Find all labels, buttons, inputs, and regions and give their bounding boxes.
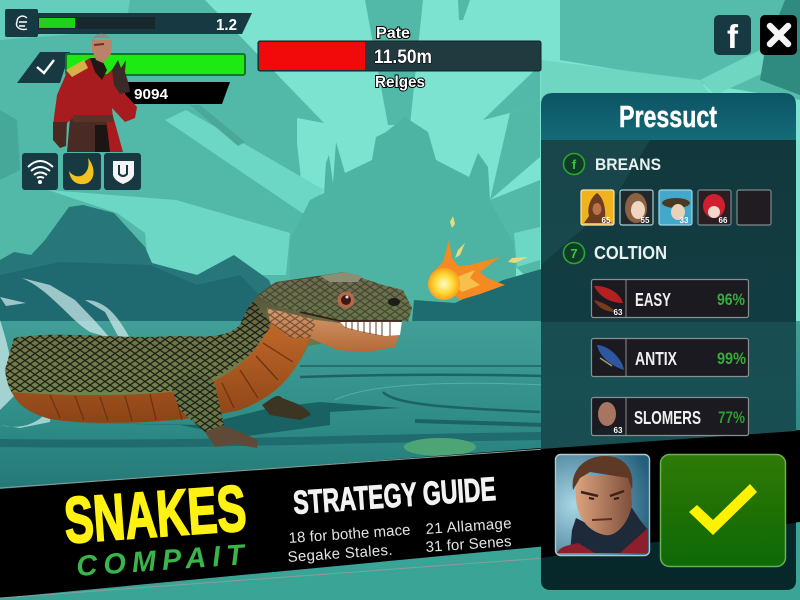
head bbox=[92, 40, 112, 63]
avatar: hat: 33 bbox=[680, 216, 689, 225]
panel black band bbox=[541, 431, 796, 558]
avatar: hat bbox=[659, 190, 692, 225]
snake shadow bbox=[40, 402, 400, 437]
nostril bbox=[388, 298, 400, 306]
row: easy: 63 bbox=[614, 308, 623, 317]
glove bbox=[53, 122, 67, 148]
mouth line bbox=[300, 312, 402, 321]
avatar: red hair: 66 bbox=[719, 216, 728, 225]
right hills bbox=[412, 268, 545, 322]
check mark bbox=[689, 484, 757, 535]
leg scale texture bbox=[170, 373, 224, 440]
panel hill tint bbox=[541, 140, 650, 265]
eye bbox=[338, 292, 354, 308]
smoke wisps bbox=[0, 278, 130, 428]
character: commander in red coat bbox=[53, 34, 137, 152]
near mountains bbox=[0, 205, 285, 322]
coat skirt bbox=[67, 118, 112, 152]
teeth bbox=[340, 321, 402, 336]
epaulette bbox=[66, 60, 88, 77]
panel lower area bbox=[541, 523, 796, 590]
section: breans: BREANS bbox=[595, 155, 661, 174]
banner text left: 18 for bothe mace bbox=[288, 522, 411, 547]
snake belly bbox=[12, 322, 310, 423]
lily pad bbox=[404, 438, 476, 456]
button: confirm bbox=[660, 454, 786, 566]
section: coltion bbox=[564, 242, 667, 264]
shirt bbox=[90, 58, 107, 80]
panel: pressuct bbox=[541, 93, 796, 590]
cheek scales bbox=[267, 308, 317, 338]
button: facebook bbox=[714, 15, 751, 55]
snake jaw bbox=[267, 308, 400, 352]
button: facebook: f bbox=[727, 18, 739, 55]
raised hand bbox=[112, 60, 130, 94]
hud: level bar bbox=[5, 9, 252, 37]
section: breans: f bbox=[572, 157, 577, 172]
head top bbox=[257, 272, 412, 322]
front foot bbox=[205, 425, 258, 448]
hud: score bar bbox=[125, 82, 230, 104]
row: easy: 96% bbox=[717, 290, 745, 309]
banner text left: Segake Stales. bbox=[287, 542, 393, 566]
section: coltion: 7 bbox=[570, 246, 578, 261]
lower mountain layer bbox=[0, 262, 285, 322]
floor bbox=[0, 321, 800, 521]
avatar: red hair bbox=[698, 190, 731, 225]
row: easy: EASY bbox=[635, 290, 671, 310]
avatar: hooded figure: 65 bbox=[602, 216, 611, 225]
title: Snakes: SNAKES bbox=[62, 471, 249, 557]
button: close bbox=[760, 15, 797, 55]
row: slomers: 63 bbox=[614, 426, 623, 435]
timer value: 11.50m bbox=[374, 47, 432, 68]
hud: level bar: 1.2 bbox=[216, 17, 237, 34]
row: slomers: SLOMERS bbox=[634, 408, 701, 428]
row: slomers: 77% bbox=[718, 408, 745, 427]
icon: moon bbox=[63, 153, 101, 190]
subtitle: Compait: COMPAIT bbox=[75, 539, 247, 583]
banner edge lines bbox=[0, 449, 545, 598]
banner text right bbox=[425, 515, 512, 556]
background rays bbox=[0, 0, 800, 322]
portrait: hero bbox=[556, 454, 650, 556]
castle silhouette bbox=[290, 117, 516, 322]
row: easy bbox=[592, 280, 748, 318]
avatar: brown hair bbox=[620, 190, 653, 225]
background sky bbox=[0, 0, 800, 340]
illustration: snake creature bbox=[0, 272, 412, 448]
panel floor tint bbox=[541, 322, 796, 450]
hud: health bar bbox=[17, 52, 245, 83]
icon: shield bbox=[104, 153, 141, 190]
torso bbox=[53, 58, 137, 125]
belly ridges bbox=[50, 343, 293, 421]
section: breans bbox=[564, 154, 661, 174]
snake scale texture bbox=[6, 302, 271, 392]
head bumps bbox=[320, 272, 362, 282]
snake body bbox=[5, 272, 400, 423]
belt bbox=[73, 115, 113, 122]
fireball bbox=[428, 216, 528, 300]
avatar: empty slot bbox=[737, 190, 771, 225]
icon: wifi bbox=[22, 153, 58, 190]
section: coltion: COLTION bbox=[594, 243, 667, 263]
timer label bottom: Relges bbox=[375, 74, 425, 91]
banner text right: 21 Allamage bbox=[425, 515, 512, 538]
floor ripples bbox=[0, 366, 545, 444]
banner text right: 31 for Senes bbox=[425, 533, 512, 556]
row: antix bbox=[592, 338, 748, 376]
avatar: hooded figure bbox=[581, 190, 614, 225]
rear foot bbox=[262, 396, 311, 420]
panel heading: Pressuct bbox=[619, 99, 717, 134]
front leg bbox=[170, 373, 224, 440]
row: slomers bbox=[592, 398, 748, 436]
hud: enemy timer bar bbox=[258, 25, 541, 91]
row: antix: 99% bbox=[717, 349, 746, 368]
panel body bbox=[541, 140, 796, 590]
panel header bbox=[541, 93, 796, 140]
bottom banner bbox=[0, 430, 800, 598]
timer label top: Pate bbox=[376, 25, 410, 42]
hud: score bar: 9094 bbox=[134, 86, 169, 103]
heading: strategy guide: STRATEGY GUIDE bbox=[292, 470, 497, 521]
avatar: brown hair: 55 bbox=[641, 216, 650, 225]
row: antix: ANTIX bbox=[635, 349, 677, 369]
head scale texture bbox=[257, 272, 412, 322]
level icon bbox=[16, 16, 27, 29]
banner text left bbox=[287, 522, 411, 566]
